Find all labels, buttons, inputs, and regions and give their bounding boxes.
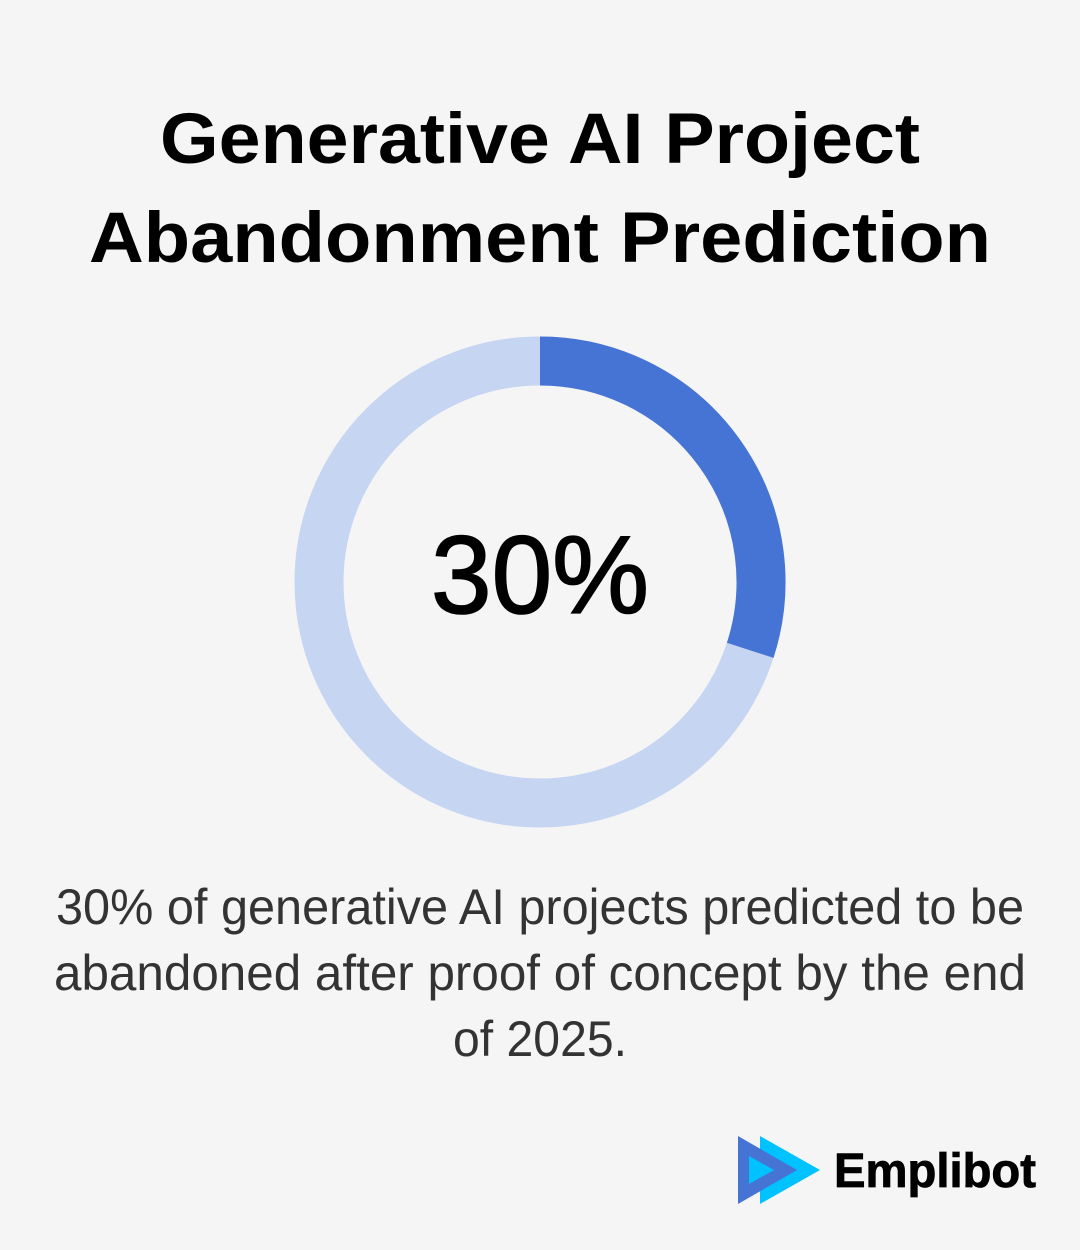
description: 30% of generative AI projects predicted to be bbox=[56, 879, 1024, 935]
title: Abandonment Prediction bbox=[89, 199, 991, 278]
logo: Emplibot bbox=[738, 1136, 1036, 1204]
donut chart: 30% bbox=[319, 361, 761, 803]
description: of 2025. bbox=[453, 1011, 627, 1067]
description bbox=[54, 879, 1026, 1067]
icon: double play triangles bbox=[738, 1136, 820, 1204]
title: Generative AI Project bbox=[160, 100, 920, 179]
description: abandoned after proof of concept by the end bbox=[54, 945, 1026, 1001]
donut value: 30% bbox=[431, 514, 649, 637]
wordmark: Emplibot bbox=[834, 1145, 1036, 1198]
title bbox=[89, 100, 991, 278]
